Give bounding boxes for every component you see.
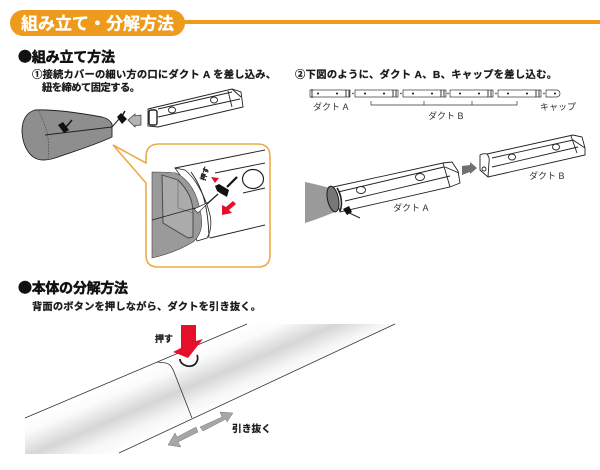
illustration: assembled cover and duct A xyxy=(305,162,460,223)
label: cap: キャップ xyxy=(540,102,576,112)
red arrow: pull cord xyxy=(222,201,236,215)
small red arrowhead xyxy=(211,177,219,183)
title banner: 組み立て・分解方法 xyxy=(21,14,174,34)
illustration: duct A upper xyxy=(148,89,243,127)
label: duct A illustration: ダクト A xyxy=(393,202,429,213)
illustration: connector cover xyxy=(22,110,127,160)
detail callout frame xyxy=(113,144,270,267)
title banner xyxy=(10,10,600,36)
label: duct A: ダクト A xyxy=(313,101,349,112)
illustration: detail connection xyxy=(152,150,265,258)
diagram: duct layout xyxy=(310,89,560,105)
text: step 1: ①接続カバーの細い方の口にダクト A を差し込み、 xyxy=(32,68,276,81)
text: disassembly step: 背面のボタンを押しながら、ダクトを引き抜く。 xyxy=(32,300,261,313)
label: pull out: 引き抜く xyxy=(232,422,271,435)
label: push: 押す xyxy=(155,333,173,344)
label: duct B illustration: ダクト B xyxy=(529,170,565,181)
label: duct B: ダクト B xyxy=(428,110,464,121)
heading: disassembly: ●本体の分解方法 xyxy=(18,278,128,298)
text: step 1: 紐を締めて固定する。 xyxy=(42,81,140,94)
arrow: insert xyxy=(128,114,141,127)
illustration: duct B xyxy=(480,135,585,177)
text: step 2: ②下図のように、ダクト A、B、キャップを差し込む。 xyxy=(295,68,557,81)
red arrow: push xyxy=(173,325,203,358)
arrow: pull out xyxy=(168,412,233,447)
heading: assembly: ●組み立て方法 xyxy=(18,47,115,67)
arrow: join ducts xyxy=(462,162,477,175)
label: push in detail: 押す xyxy=(198,166,211,182)
illustration: duct body xyxy=(25,324,395,454)
